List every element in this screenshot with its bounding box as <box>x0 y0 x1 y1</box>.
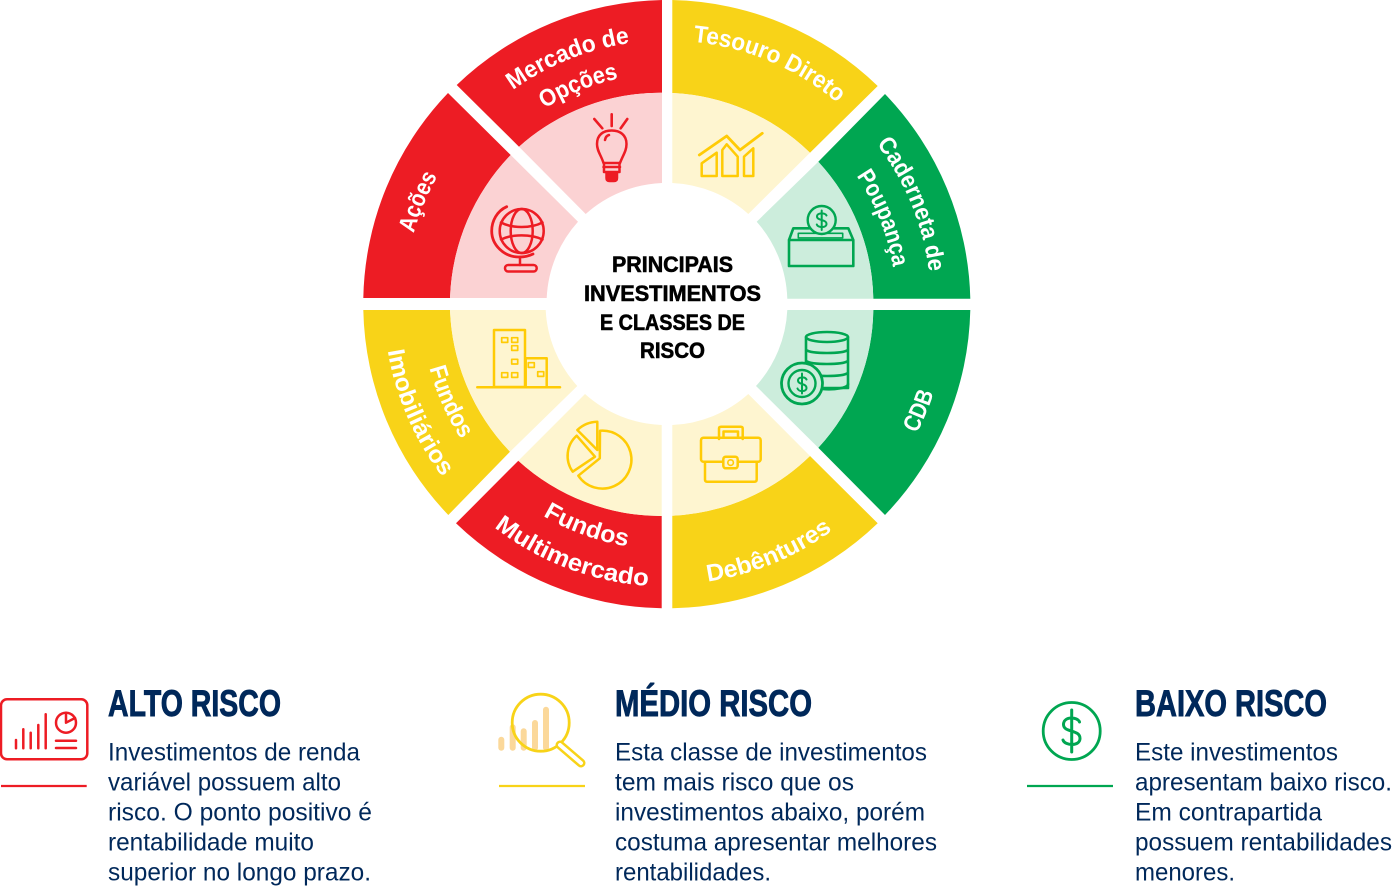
central title: PRINCIPAIS <box>612 252 733 277</box>
text: médio risco description: costuma apresentar melhores <box>615 828 937 856</box>
icon: coin in savings box <box>789 206 853 266</box>
segment: Fundos Imobiliários <box>363 310 577 515</box>
label: Mercado de Opções: Opções <box>540 67 617 106</box>
icon: briefcase <box>701 427 761 482</box>
icon: growth chart <box>699 133 762 176</box>
text: baixo risco description: possuem rentabilidades <box>1135 828 1392 856</box>
icon: dashboard <box>1 699 87 759</box>
legend: médio risco <box>499 682 937 886</box>
text: alto risco description: variável possuem alto <box>108 768 341 796</box>
segment: Mercado de Opções <box>456 0 662 214</box>
label: Debêntures: Debêntures <box>706 522 830 582</box>
central title: RISCO <box>640 338 705 363</box>
label: Fundos Imobiliários: Imobiliários <box>388 349 450 475</box>
central title: E CLASSES DE <box>600 310 745 335</box>
text: alto risco description: rentabilidade muito <box>108 828 314 856</box>
segment: Caderneta de Poupança <box>756 94 970 299</box>
risk wheel <box>363 0 970 608</box>
text: baixo risco description: Em contrapartida <box>1135 798 1322 826</box>
label: Fundos Multimercado: Fundos <box>544 502 628 546</box>
segment: Fundos Multimercado <box>456 394 662 608</box>
icon: coin stack <box>782 332 848 404</box>
legend: baixo risco <box>1027 682 1392 886</box>
text: médio risco description: investimentos abaixo, porém <box>615 798 925 826</box>
segment: CDB <box>756 310 970 515</box>
text: médio risco description: rentabilidades. <box>615 858 771 886</box>
central title: INVESTIMENTOS <box>584 281 761 306</box>
icon: light bulb <box>594 114 627 181</box>
label: Caderneta de Poupança: Poupança <box>857 168 905 268</box>
label: Fundos Multimercado: Multimercado <box>495 515 648 586</box>
text: médio risco description <box>615 738 937 886</box>
heading: alto risco: ALTO RISCO <box>108 682 281 724</box>
text: médio risco description: Esta classe de investimentos <box>615 738 927 766</box>
text: baixo risco description <box>1135 738 1392 886</box>
legend: alto risco <box>1 682 372 886</box>
text: baixo risco description: menores. <box>1135 858 1235 886</box>
label: Caderneta de Poupança: Caderneta de <box>880 138 944 270</box>
heading: médio risco: MÉDIO RISCO <box>615 682 812 724</box>
text: alto risco description: risco. O ponto positivo é <box>108 798 372 826</box>
central title <box>584 252 761 363</box>
label: CDB: CDB <box>904 390 932 430</box>
icon: pie chart <box>568 422 631 489</box>
text: baixo risco description: Este investimentos <box>1135 738 1338 766</box>
text: alto risco description <box>108 738 372 886</box>
text: alto risco description: superior no longo prazo. <box>108 858 371 886</box>
text: alto risco description: Investimentos de renda <box>108 738 360 766</box>
divider: alto risco <box>1 785 87 787</box>
heading: baixo risco: BAIXO RISCO <box>1135 682 1327 724</box>
label: Ações: Ações <box>400 172 436 233</box>
divider: baixo risco <box>1027 785 1113 787</box>
icon: globe <box>492 207 544 272</box>
segment: Ações <box>363 93 578 298</box>
icon: buildings <box>477 330 560 387</box>
icon: magnifier over bars <box>501 694 581 763</box>
divider: médio risco <box>499 785 585 787</box>
text: médio risco description: tem mais risco que os <box>615 768 854 796</box>
label: Tesouro Direto: Tesouro Direto <box>695 25 843 100</box>
label: Mercado de Opções: Mercado de <box>504 28 628 90</box>
segment: Debêntures <box>672 394 878 608</box>
segment: Tesouro Direto <box>672 0 878 214</box>
icon: dollar coin <box>1043 702 1100 760</box>
label: Fundos Imobiliários: Fundos <box>430 364 470 438</box>
